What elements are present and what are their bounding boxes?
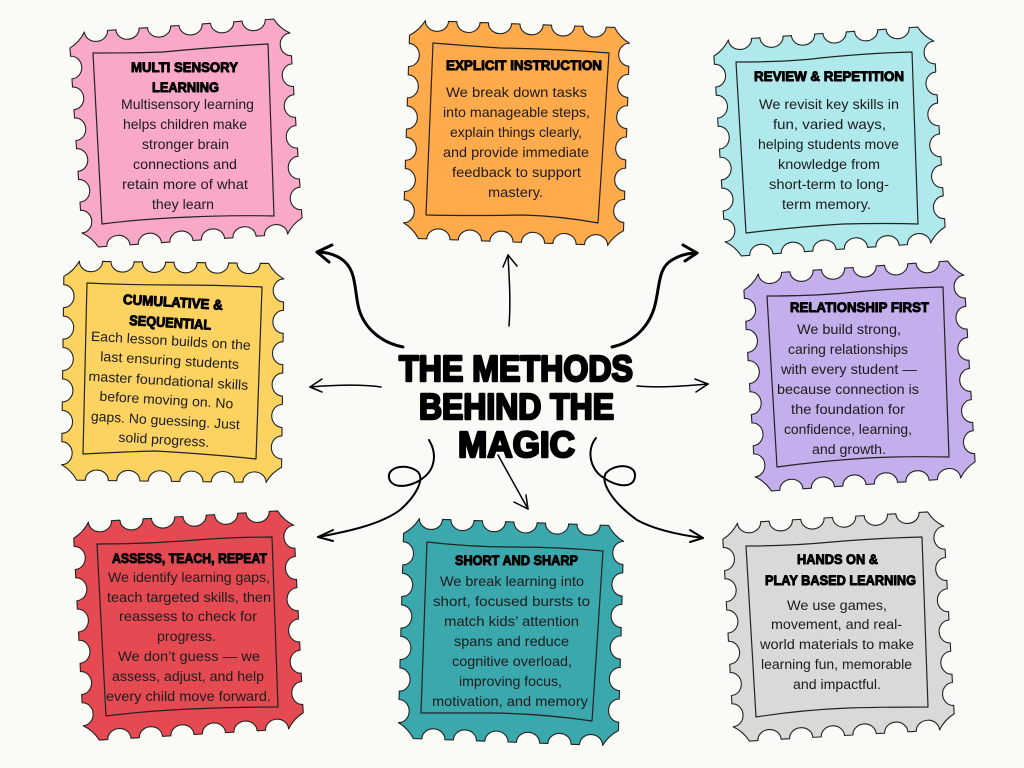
stamp shape: light blue bbox=[713, 26, 946, 257]
stamp shape: purple bbox=[743, 260, 976, 492]
inner frame bbox=[736, 52, 918, 233]
stamp shape: yellow bbox=[61, 261, 284, 483]
heading: SEQUENTIAL bbox=[129, 312, 212, 333]
heading: ASSESS, TEACH, REPEAT bbox=[112, 550, 267, 566]
title bbox=[399, 348, 633, 465]
body text: We use games, bbox=[787, 598, 887, 613]
heading: HANDS ON & bbox=[797, 551, 878, 567]
body text bbox=[106, 570, 271, 704]
heading: EXPLICIT INSTRUCTION bbox=[446, 57, 602, 73]
arrow: looped to hands on learning bbox=[590, 438, 703, 542]
body text: mastery. bbox=[488, 185, 543, 200]
arrow: to relationship first bbox=[637, 379, 708, 392]
body text: and provide immediate bbox=[443, 145, 589, 160]
body text: every child move forward. bbox=[106, 689, 271, 704]
title: THE METHODS bbox=[399, 348, 633, 389]
stamp shape: orange bbox=[403, 20, 630, 246]
body text bbox=[121, 97, 254, 212]
body text: Multisensory learning bbox=[121, 97, 254, 112]
stamp shape: grey bbox=[722, 511, 955, 742]
heading bbox=[131, 59, 239, 95]
heading: RELATIONSHIP FIRST bbox=[790, 299, 929, 315]
body text: caring relationships bbox=[788, 342, 908, 357]
body text: motivation, and memory bbox=[432, 694, 588, 709]
panel: multi sensory learning bbox=[69, 18, 303, 248]
heading bbox=[123, 291, 223, 333]
body text bbox=[777, 322, 919, 457]
body text: Each lesson builds on the bbox=[91, 329, 251, 353]
body text: learning fun, memorable bbox=[761, 657, 912, 672]
body text: and impactful. bbox=[793, 677, 881, 692]
body text: We break learning into bbox=[440, 574, 584, 589]
body text: last ensuring students bbox=[100, 349, 240, 372]
inner frame bbox=[93, 44, 274, 224]
heading: REVIEW & REPETITION bbox=[754, 68, 904, 84]
stamp shape: red bbox=[73, 510, 304, 741]
panel: cumulative and sequential bbox=[61, 261, 284, 483]
body text: into manageable steps, bbox=[443, 105, 590, 120]
inner frame bbox=[421, 542, 603, 721]
body text: and growth. bbox=[812, 442, 886, 457]
title: BEHIND THE bbox=[419, 386, 614, 427]
body text: term memory. bbox=[782, 197, 871, 212]
body text: cognitive overload, bbox=[452, 654, 572, 669]
arrow: to cumulative and sequential bbox=[310, 379, 381, 392]
body text: spans and reduce bbox=[454, 634, 569, 649]
body text: confidence, learning, bbox=[784, 422, 912, 437]
panel: review and repetition bbox=[713, 26, 946, 257]
body text: explain things clearly, bbox=[450, 125, 582, 140]
body text: We revisit key skills in bbox=[759, 97, 899, 112]
body text: retain more of what bbox=[122, 177, 248, 192]
stamp shape: pink bbox=[69, 18, 303, 248]
arrow: to multi sensory learning bbox=[317, 245, 403, 347]
panel: short and sharp bbox=[398, 518, 624, 746]
body text: fun, varied ways, bbox=[773, 117, 886, 132]
body text: reassess to check for bbox=[119, 609, 258, 624]
body text: stronger brain bbox=[142, 137, 229, 152]
body text: gaps. No guessing. Just bbox=[91, 409, 240, 432]
body text bbox=[432, 574, 590, 709]
body text: match kids’ attention bbox=[444, 614, 579, 629]
arrow: to explicit instruction bbox=[503, 255, 517, 326]
inner frame bbox=[767, 287, 949, 467]
body text: knowledge from bbox=[778, 157, 880, 172]
body text: We break down tasks bbox=[446, 85, 587, 100]
stamp shape: teal bbox=[398, 518, 624, 746]
heading: MULTI SENSORY bbox=[131, 59, 239, 75]
body text: We don’t guess — we bbox=[118, 649, 260, 664]
body text bbox=[88, 329, 251, 450]
inner frame bbox=[83, 283, 262, 459]
body text: helping students move bbox=[758, 137, 899, 152]
body text: the foundation for bbox=[791, 402, 906, 417]
arrow: looped to assess, teach, repeat bbox=[318, 440, 434, 541]
body text: We build strong, bbox=[797, 322, 901, 337]
panel: assess, teach, repeat bbox=[73, 510, 304, 741]
heading: CUMULATIVE & bbox=[123, 291, 223, 313]
body text: before moving on. No bbox=[99, 389, 234, 411]
body text: feedback to support bbox=[452, 165, 581, 180]
heading bbox=[765, 551, 916, 588]
body text: master foundational skills bbox=[88, 369, 249, 393]
heading: PLAY BASED LEARNING bbox=[765, 572, 916, 588]
body text bbox=[443, 85, 590, 200]
body text: helps children make bbox=[123, 117, 247, 132]
body text: with every student — bbox=[780, 362, 917, 377]
heading: SHORT AND SHARP bbox=[455, 552, 578, 568]
inner frame bbox=[746, 537, 928, 717]
body text: short, focused bursts to bbox=[433, 594, 590, 609]
inner frame bbox=[97, 537, 278, 716]
body text bbox=[758, 97, 899, 212]
body text: world materials to make bbox=[759, 637, 914, 652]
body text: movement, and real- bbox=[771, 617, 902, 632]
body text: because connection is bbox=[777, 382, 919, 397]
arrow: to review and repetition bbox=[612, 245, 697, 347]
body text: improving focus, bbox=[459, 674, 562, 689]
title: MAGIC bbox=[458, 424, 575, 465]
heading: LEARNING bbox=[152, 79, 219, 95]
body text bbox=[759, 598, 914, 692]
body text: teach targeted skills, then bbox=[107, 590, 271, 605]
body text: solid progress. bbox=[118, 430, 210, 450]
arrow: to short and sharp bbox=[498, 455, 528, 509]
panel: hands on and play based learning bbox=[722, 511, 955, 742]
inner frame bbox=[426, 43, 609, 223]
panel: explicit instruction bbox=[403, 20, 630, 246]
body text: assess, adjust, and help bbox=[112, 669, 264, 684]
body text: connections and bbox=[133, 157, 237, 172]
body text: We identify learning gaps, bbox=[108, 570, 270, 585]
body text: short-term to long- bbox=[769, 177, 889, 192]
panel: relationship first bbox=[743, 260, 976, 492]
body text: progress. bbox=[157, 629, 216, 644]
body text: they learn bbox=[152, 197, 214, 212]
